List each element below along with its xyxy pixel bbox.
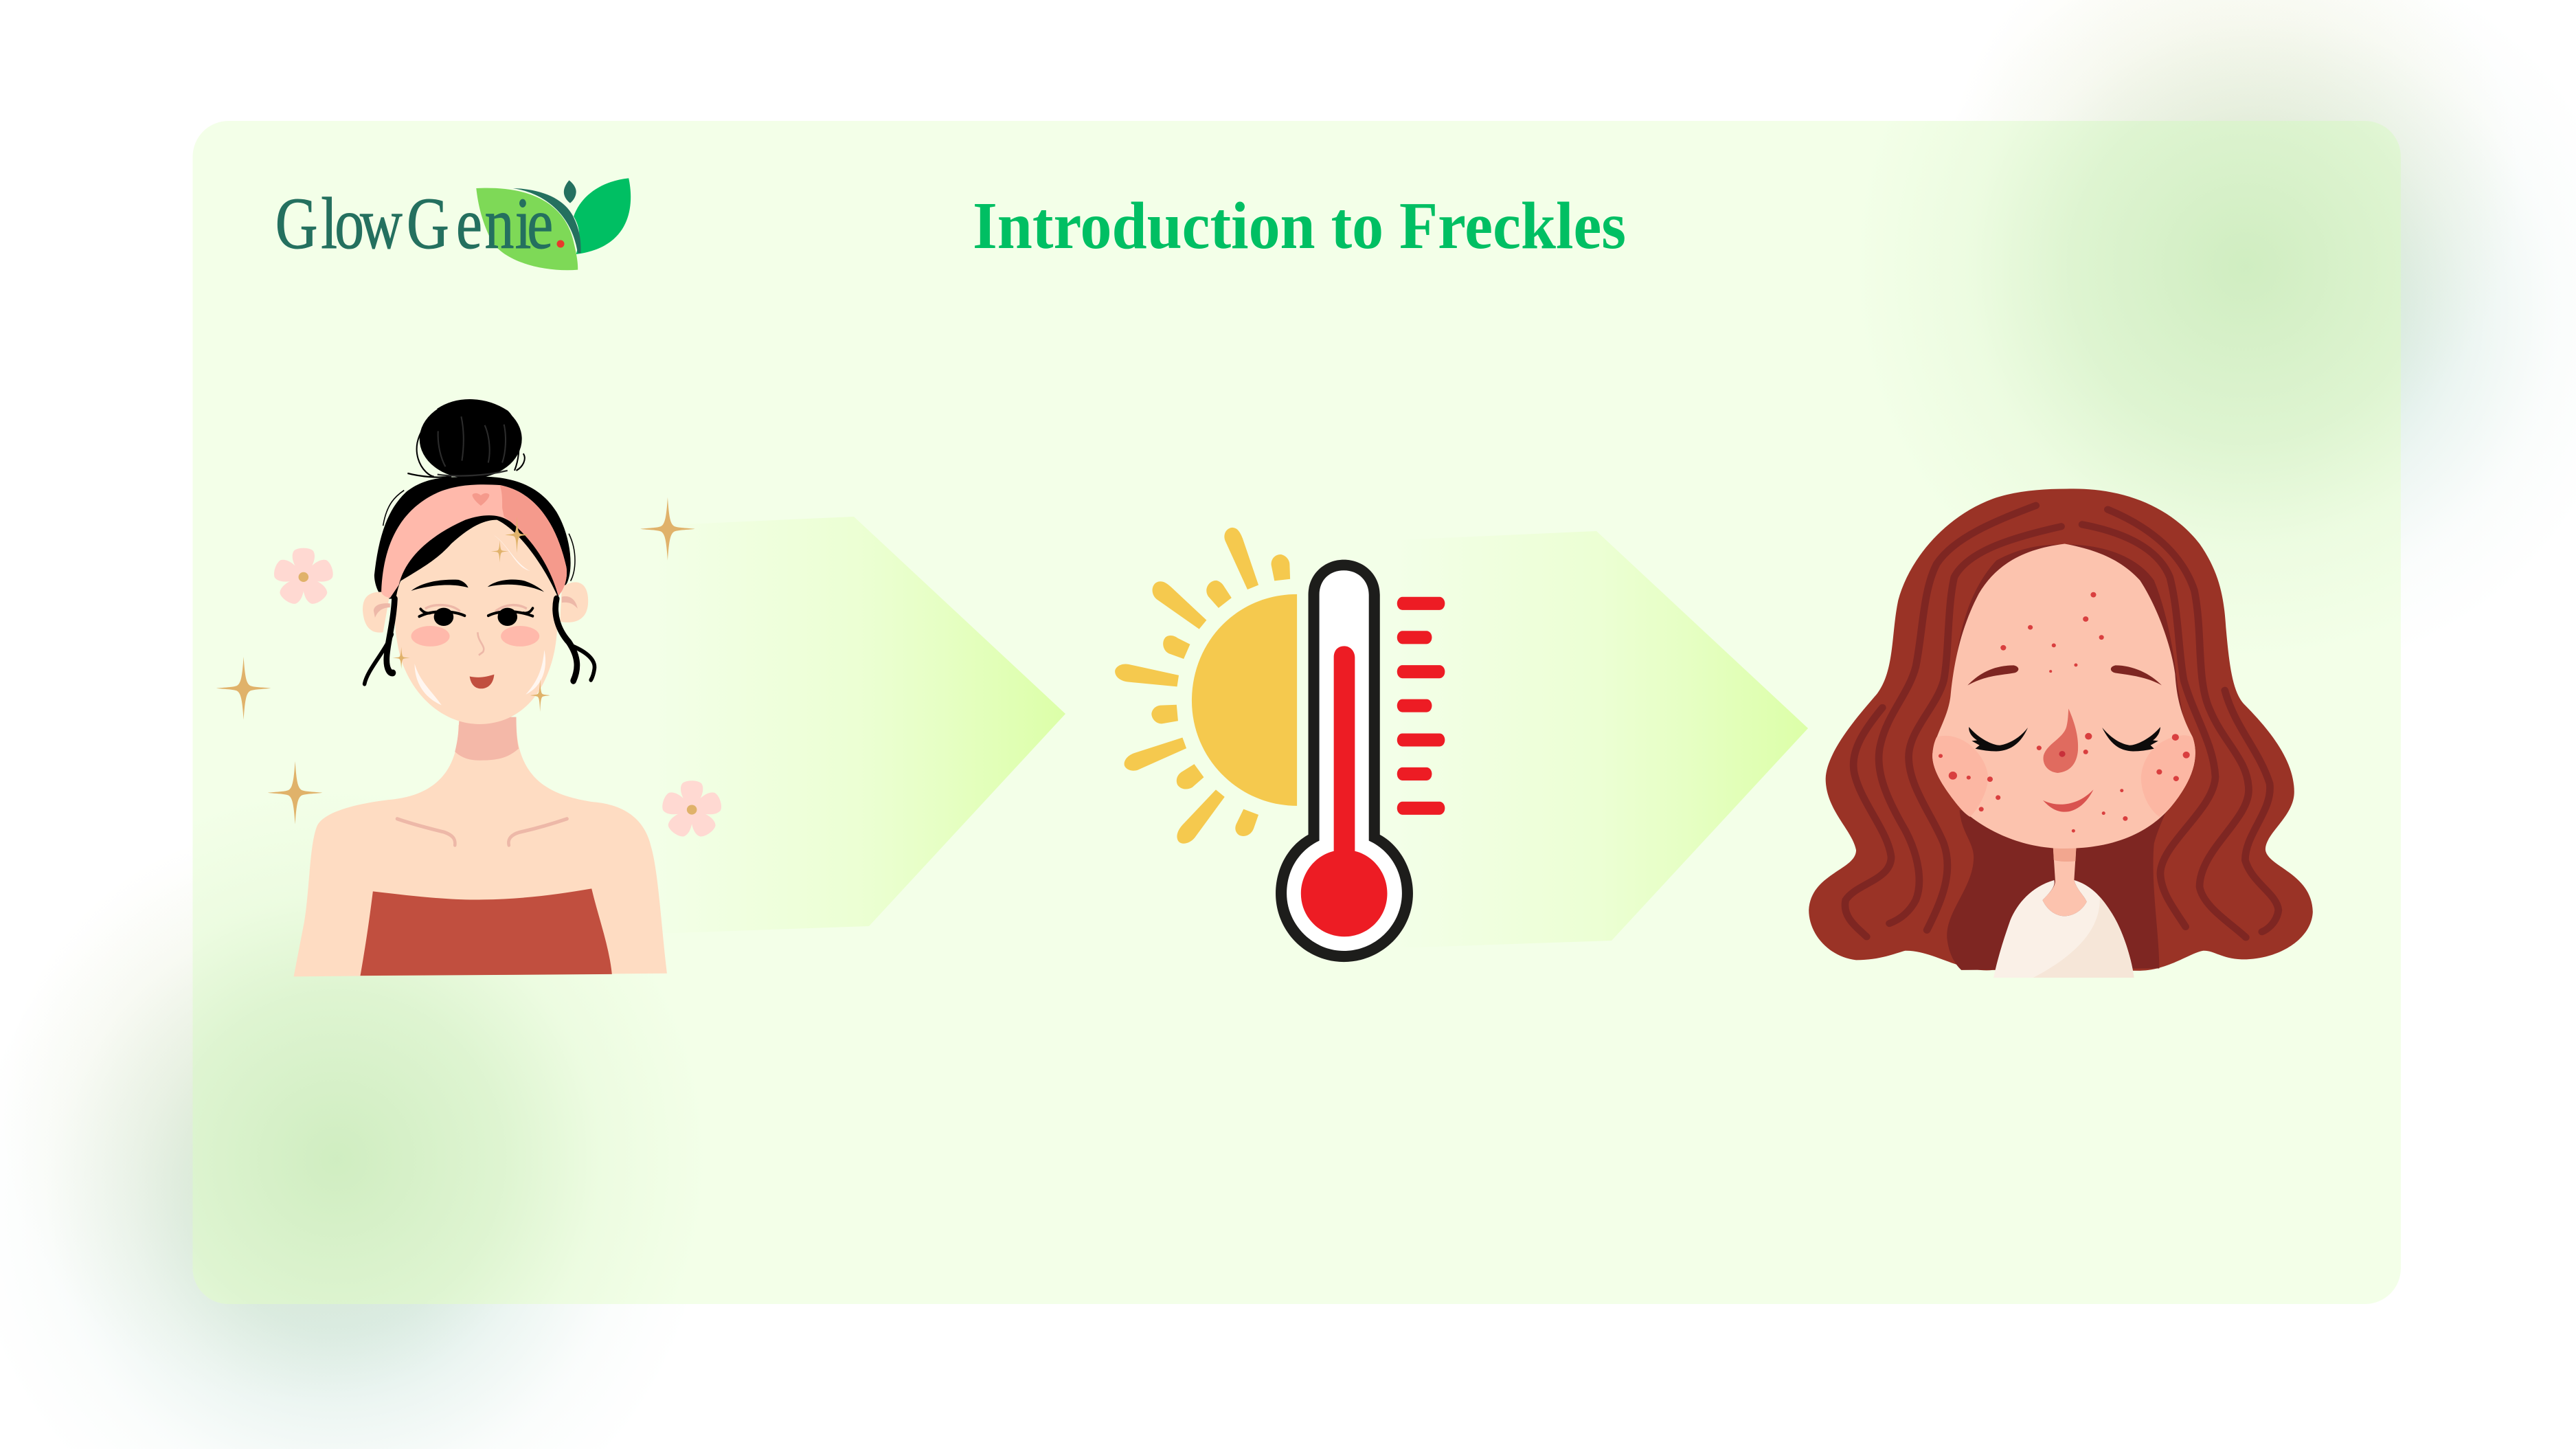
arrow: healthy skin to sun exposure <box>653 517 1065 934</box>
hair shadow behind neck <box>1947 810 2167 970</box>
hair wisps <box>365 598 595 684</box>
title: Introduction to Freckles <box>973 189 1626 262</box>
body <box>294 725 667 976</box>
logo leaves <box>476 178 631 270</box>
flower right <box>660 780 724 840</box>
strapless top <box>360 888 612 976</box>
panel: main card <box>192 121 2401 1304</box>
stray hair outlines <box>383 491 575 581</box>
logo wordmark: GlowGenie <box>275 183 553 264</box>
hair shadow around face <box>1947 544 2184 720</box>
face <box>395 520 558 724</box>
sun rays <box>1115 528 1290 844</box>
thermometer scale ticks <box>1397 597 1445 815</box>
neck shadow <box>455 717 519 761</box>
small face sparkles <box>392 517 550 712</box>
mouth <box>2043 789 2093 812</box>
face <box>1932 543 2195 849</box>
arrow: sun exposure to freckles <box>1395 531 1808 948</box>
thermometer outline <box>1276 560 1413 962</box>
freckles <box>1939 592 2190 833</box>
ear left <box>363 592 390 633</box>
thermometer mercury <box>1301 646 1387 936</box>
cheeks <box>1932 735 2195 817</box>
hair strands <box>1845 506 2279 937</box>
mouth <box>470 675 494 688</box>
flower left <box>271 548 335 607</box>
hair <box>1809 488 2313 971</box>
hair cap <box>374 477 571 598</box>
skin highlights <box>415 535 545 705</box>
large gold sparkles <box>216 497 695 824</box>
eyebrows <box>411 580 544 592</box>
illustration: woman with clear skin <box>216 400 724 976</box>
thermometer glass <box>1287 570 1402 951</box>
blurred background blob: top right <box>1786 0 2576 756</box>
eyebrows <box>1967 665 2162 685</box>
logo: GlowGenie <box>275 178 631 270</box>
logo red dot <box>556 240 565 247</box>
closed eyes <box>1969 727 2160 751</box>
eyes <box>419 605 533 626</box>
shirt <box>1993 880 2134 978</box>
illustration: woman with freckles <box>1809 488 2313 978</box>
ear right <box>560 582 588 622</box>
sun disc <box>1192 594 1297 806</box>
headband <box>381 484 567 598</box>
blurred background blob: bottom left <box>0 790 756 1449</box>
neck <box>2042 847 2087 916</box>
nose <box>477 632 484 655</box>
nose <box>2044 708 2078 773</box>
hair bun <box>407 400 525 478</box>
neck shadow <box>2053 847 2076 862</box>
collarbones <box>397 819 567 845</box>
blush <box>411 626 539 647</box>
icon: sun and thermometer <box>1115 528 1445 962</box>
